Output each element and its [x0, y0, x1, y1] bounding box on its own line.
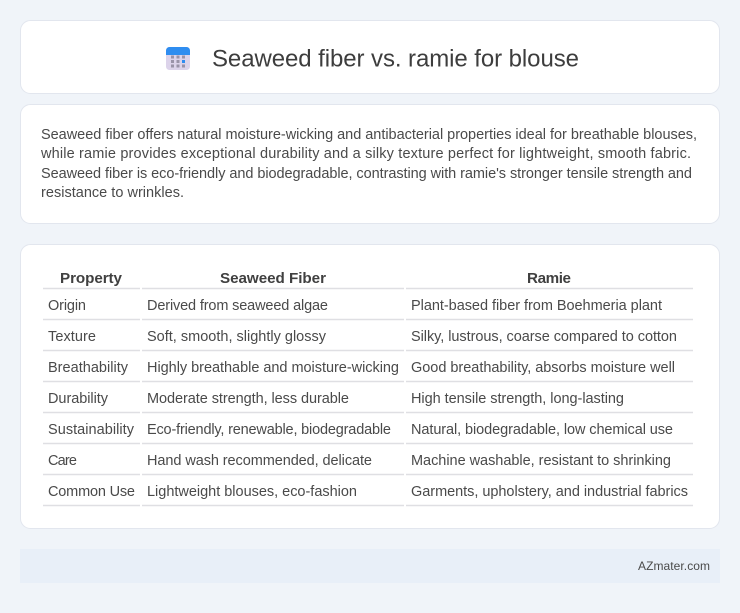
- row: sustainability: [48, 422, 673, 438]
- text block: summary: resistance to wrinkles.: [41, 185, 184, 201]
- row: origin: Plant-based fiber from Boehmeria plant: [411, 298, 662, 314]
- table header: Seaweed Fiber: [220, 270, 326, 287]
- text block: summary: Seaweed fiber is eco-friendly and biodegradable, contrasting with ramie's stronger tensile strength and: [41, 166, 692, 182]
- row: common use: [48, 484, 688, 500]
- panel: comparison table: [20, 244, 720, 528]
- row: texture: Texture: [48, 329, 96, 345]
- row: texture: [48, 329, 677, 345]
- row: breathability: Breathability: [48, 360, 129, 376]
- row: sustainability: Eco-friendly, renewable, biodegradable: [147, 422, 391, 438]
- row: texture: Soft, smooth, slightly glossy: [147, 329, 327, 345]
- table header: Property: [60, 270, 123, 287]
- text block: summary: while ramie provides exceptional durability and a silky texture perfect for lightweight, smooth fabric.: [40, 146, 691, 162]
- row: common use: Garments, upholstery, and industrial fabrics: [411, 484, 688, 500]
- row: common use: Lightweight blouses, eco-fashion: [147, 484, 357, 500]
- row: durability: [48, 391, 624, 407]
- footer credit: AZmater.com: [638, 559, 710, 573]
- text block: summary: Seaweed fiber offers natural moisture-wicking and antibacterial properties ideal for breathable blouses,: [41, 127, 697, 143]
- row: common use: Common Use: [48, 484, 135, 500]
- title: Seaweed fiber vs. ramie for blouse: [212, 46, 579, 72]
- row: texture: Silky, lustrous, coarse compared to cotton: [411, 329, 677, 345]
- row: breathability: Highly breathable and moisture-wicking: [147, 360, 399, 376]
- row: care: Hand wash recommended, delicate: [147, 453, 372, 469]
- table header: [60, 270, 571, 287]
- row: durability: High tensile strength, long-lasting: [411, 391, 624, 407]
- row: breathability: Good breathability, absorbs moisture well: [411, 360, 675, 376]
- icon: calendar: [166, 47, 190, 70]
- row: origin: Derived from seaweed algae: [147, 298, 328, 314]
- panel: description: [20, 104, 720, 224]
- row: durability: Moderate strength, less durable: [147, 391, 349, 407]
- row: breathability: [48, 360, 675, 376]
- row: origin: Origin: [48, 298, 86, 314]
- footer: [20, 549, 720, 583]
- row: sustainability: Sustainability: [48, 422, 135, 438]
- table header: Ramie: [527, 270, 571, 287]
- panel: header: [20, 20, 720, 94]
- row: sustainability: Natural, biodegradable, low chemical use: [411, 422, 673, 438]
- text block: summary: [40, 127, 697, 201]
- row: care: Care: [48, 453, 77, 469]
- row: care: [48, 453, 671, 469]
- row: care: Machine washable, resistant to shrinking: [411, 453, 671, 469]
- row: origin: [48, 298, 662, 314]
- row: durability: Durability: [48, 391, 109, 407]
